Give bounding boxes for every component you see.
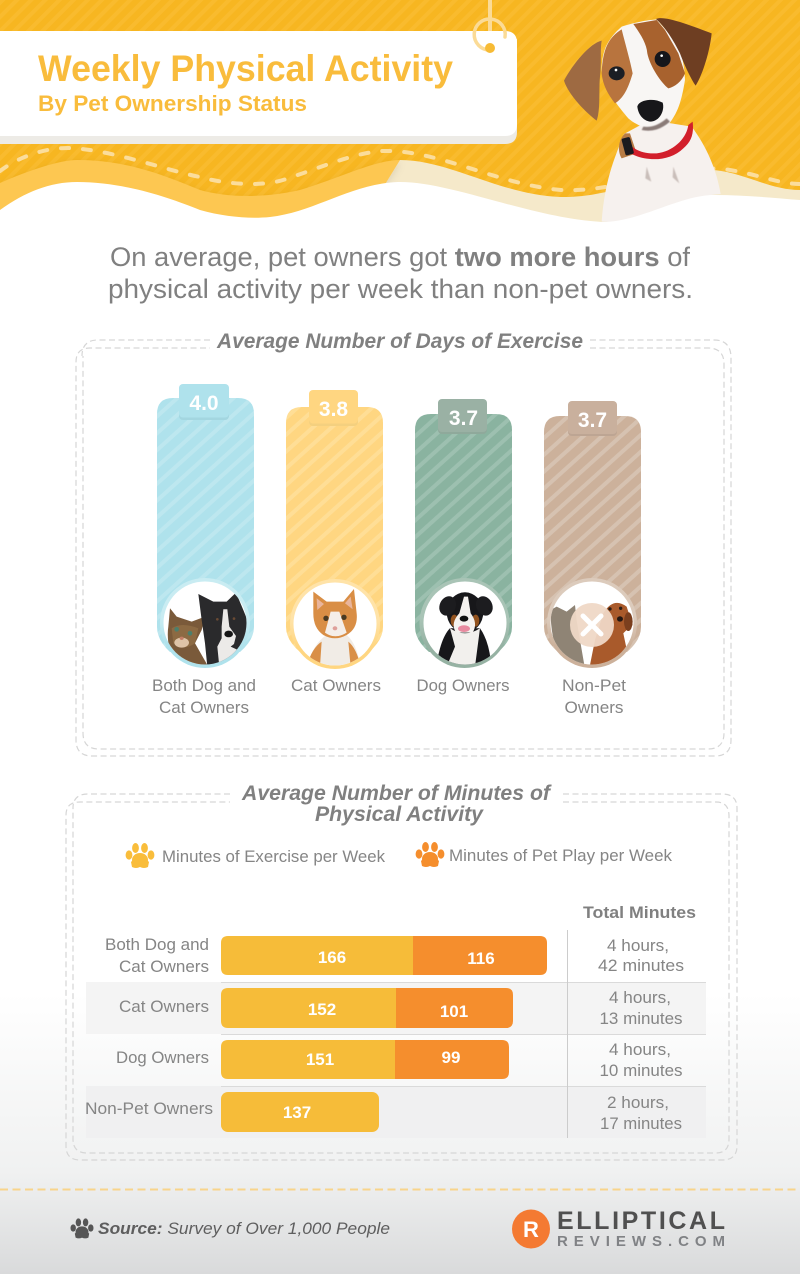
table row: cat owners: 13 minutes [600, 1010, 682, 1028]
table row: dog owners: 99 [442, 1048, 460, 1067]
collar [623, 122, 693, 159]
logo: elliptical reviews: ELLIPTICAL [557, 1207, 725, 1235]
bar labels: Non-Pet [562, 677, 626, 695]
table row: non-pet owners: 137 [283, 1103, 311, 1122]
source note: Source: Survey of Over 1,000 People [98, 1219, 390, 1238]
icon: cross [570, 603, 614, 647]
bar labels: Both Dog and [152, 677, 256, 695]
intro text: physical activity per week than non-pet owners. [108, 274, 693, 304]
table row: cat owners [119, 988, 682, 1028]
table row: cat owners: 101 [440, 1002, 468, 1021]
bar labels: Owners [564, 699, 624, 717]
value badge: 3.7 non-pet: 3.7 [578, 409, 607, 432]
table row: both dog and cat owners: 116 [467, 949, 495, 968]
illustration: puppy [564, 18, 721, 222]
table row: dog owners: Dog Owners [116, 1049, 209, 1067]
table row: dog owners: 151 [306, 1050, 334, 1069]
white wave overlap under puppy [590, 195, 730, 230]
bar labels: Dog Owners [416, 677, 510, 695]
table column heading: Total Minutes [583, 904, 696, 922]
bar: non-pet owners [544, 416, 641, 668]
legend: exercise: Minutes of Exercise per Week [162, 848, 386, 866]
table row: both dog and cat owners: Both Dog and [105, 936, 209, 954]
intro text [108, 242, 693, 304]
heading: Average Number of Days of Exercise [216, 330, 583, 353]
logo: elliptical reviews [512, 1207, 725, 1250]
table row stripes [86, 982, 706, 1138]
value badge: 4.0: 4.0 [189, 392, 219, 415]
table row: non-pet owners [85, 1092, 682, 1133]
table row: cat owners: Cat Owners [119, 998, 209, 1016]
heading: Physical Activity [315, 803, 484, 826]
cream wave [300, 160, 800, 225]
table row: cat owners: 4 hours, [609, 989, 671, 1007]
bar: cat owners [286, 407, 383, 669]
photo: dog [438, 592, 493, 664]
light yellow wave [0, 160, 400, 225]
icon: hanging hook [474, 0, 505, 53]
table row: cat owners: 152 [308, 1000, 336, 1019]
photo: cat [310, 589, 358, 666]
logo: elliptical reviews: R [523, 1217, 539, 1242]
panel: average number of days of exercise [76, 330, 731, 756]
table row: dog owners [116, 1040, 682, 1080]
table row: both dog and cat owners: Cat Owners [119, 958, 209, 976]
bar labels: Cat Owners [291, 677, 381, 695]
table row: non-pet owners: 17 minutes [600, 1115, 682, 1133]
subtitle: By Pet Ownership Status [38, 91, 307, 116]
panel: average number of minutes of physical activity [66, 782, 737, 1160]
bar: both dog and cat owners [157, 398, 254, 668]
bar labels [152, 677, 626, 717]
stitched dashed line [0, 148, 800, 190]
table row: both dog and cat owners [105, 936, 684, 976]
footer divider [0, 1188, 800, 1190]
logo: elliptical reviews: REVIEWS.COM [557, 1233, 725, 1250]
value badge: 3.7 dog [438, 399, 487, 434]
bar labels: Cat Owners [159, 699, 249, 717]
legend: pet play: Minutes of Pet Play per Week [449, 847, 673, 865]
table row: non-pet owners: Non-Pet Owners [85, 1100, 213, 1118]
heading: Average Number of Minutes of [241, 782, 552, 805]
photo: cat and dog [551, 603, 633, 665]
value badge: 3.8 [309, 390, 358, 426]
bar: dog owners [415, 414, 512, 668]
table row: both dog and cat owners: 166 [318, 948, 346, 967]
table row: dog owners: 4 hours, [609, 1041, 671, 1059]
legend: pet play [416, 842, 673, 867]
title card [0, 31, 517, 144]
table row: both dog and cat owners: 42 minutes [598, 957, 684, 975]
value badge: 3.8: 3.8 [319, 398, 348, 421]
value badge: 3.7 dog: 3.7 [449, 407, 478, 430]
table row: dog owners: 10 minutes [600, 1062, 682, 1080]
value badge: 3.7 non-pet [568, 401, 617, 436]
white wave [0, 182, 800, 240]
legend: exercise [126, 843, 386, 868]
header banner [0, 0, 800, 240]
title: Weekly Physical Activity [38, 48, 453, 89]
value badge: 4.0 [179, 384, 229, 420]
table row: non-pet owners: 2 hours, [607, 1094, 669, 1112]
heading [241, 782, 552, 826]
photo: cat and dog [168, 593, 247, 667]
table row: both dog and cat owners: 4 hours, [607, 937, 669, 955]
intro text: On average, pet owners got two more hours of [110, 242, 690, 272]
